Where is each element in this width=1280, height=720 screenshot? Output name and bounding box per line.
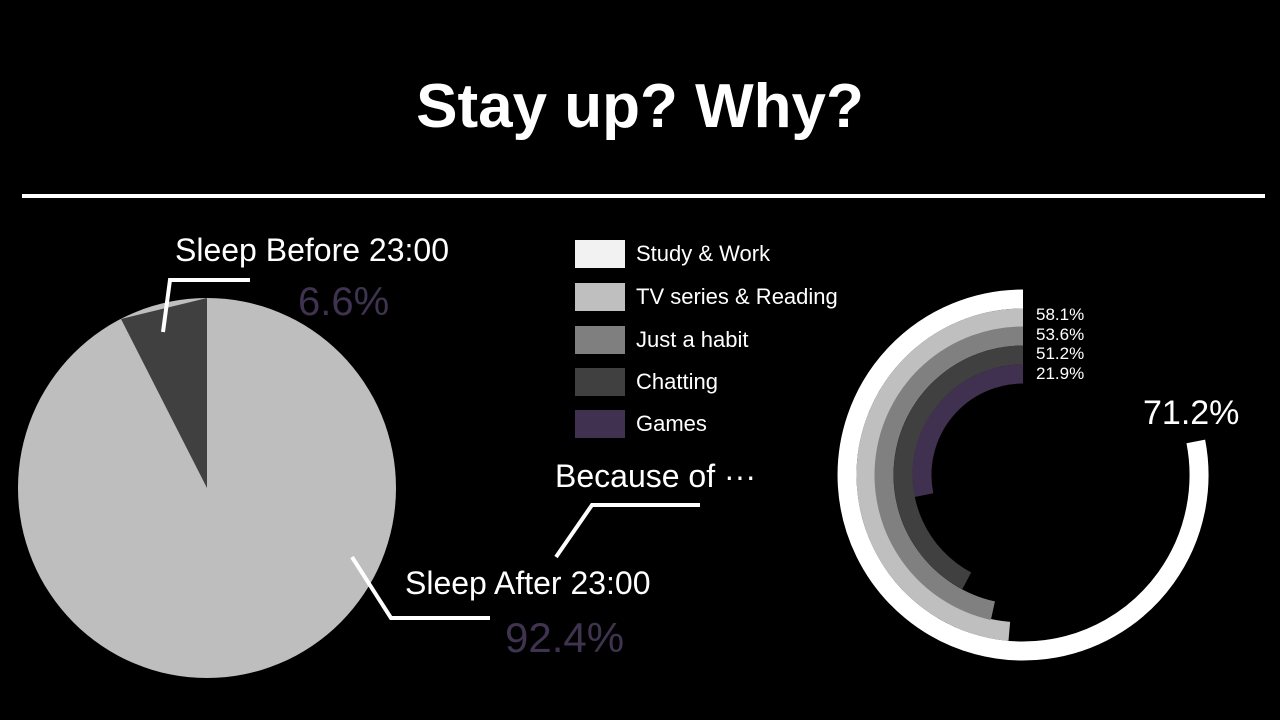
legend	[575, 240, 838, 438]
label: sleep before: Sleep Before 23:00	[175, 232, 449, 268]
label: because of: Because of ···	[555, 458, 756, 494]
legend: habit	[575, 326, 749, 354]
value: 71.2%: 71.2%	[1143, 394, 1239, 432]
radial values: 51.2%	[1036, 344, 1084, 363]
radial bar chart	[847, 299, 1199, 651]
legend: chatting	[575, 368, 718, 396]
radial values: 53.6%	[1036, 325, 1084, 344]
legend: Chatting	[636, 369, 718, 394]
radial values: 58.1%	[1036, 305, 1084, 324]
legend: Games	[636, 411, 707, 436]
radial values	[1036, 305, 1084, 383]
legend: Study & Work	[636, 241, 770, 266]
callout line: because	[556, 505, 700, 557]
legend: TV series & Reading	[636, 284, 838, 309]
value: 6.6%: 6.6%	[298, 280, 389, 324]
value: 92.4%: 92.4%	[505, 614, 624, 661]
legend: Just a habit	[636, 327, 749, 352]
radial values: 21.9%	[1036, 364, 1084, 383]
label: sleep after: Sleep After 23:00	[405, 565, 651, 601]
callout line: after	[352, 557, 490, 618]
legend: study & work	[575, 240, 770, 268]
title: Stay up? Why?	[416, 72, 864, 141]
legend: games	[575, 410, 707, 438]
callout line: before	[163, 280, 250, 332]
legend: tv series	[575, 283, 838, 311]
pie chart	[18, 298, 396, 678]
